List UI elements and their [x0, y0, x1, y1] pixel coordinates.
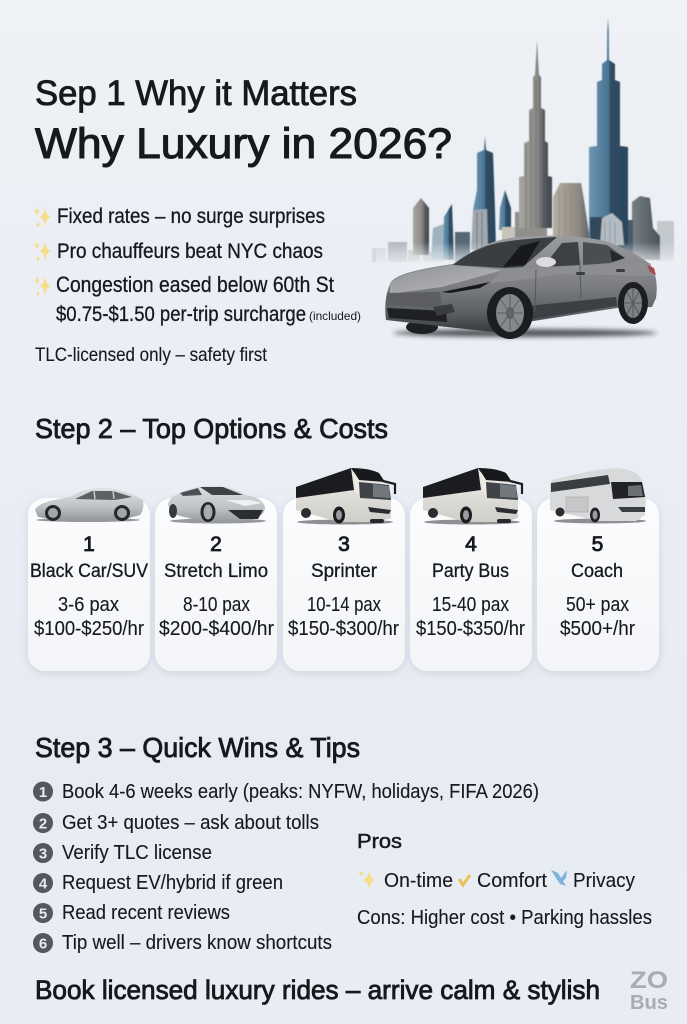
option number: 2 [210, 533, 222, 556]
title: Sep 1 Why it Matters [35, 74, 357, 113]
tip 6: Tip well – drivers know shortcuts [62, 932, 332, 954]
option number: 3 [338, 533, 350, 556]
tip 1: Book 4-6 weeks early (peaks: NYFW, holidays, FIFA 2026) [62, 781, 539, 803]
tip 3: 3 [39, 846, 47, 862]
icon: white coach [550, 468, 646, 524]
pro: privacy: Privacy [573, 870, 635, 892]
step 1 benefit list [34, 205, 361, 366]
capacity: 15-40 pax [432, 594, 509, 616]
option name: Party Bus [432, 561, 509, 582]
icon: butterfly [551, 870, 567, 886]
tip 2: Get 3+ quotes – ask about tolls [62, 812, 319, 834]
panel: black car [28, 488, 150, 671]
capacity: 50+ pax [566, 594, 629, 616]
title [35, 74, 452, 168]
icon: sparkle [34, 207, 51, 229]
numbered tips list [33, 781, 539, 954]
benefit: fixed rates: Fixed rates – no surge surprises [57, 205, 325, 228]
option number: 5 [592, 533, 603, 556]
logo: ZO Bus [630, 967, 668, 1014]
option name: Coach [571, 561, 623, 582]
tip 6: 6 [39, 936, 47, 952]
option number: 1 [83, 533, 95, 556]
icon: sparkle [34, 276, 51, 298]
illustration: city skyline [372, 18, 681, 268]
tip 2: 2 [39, 816, 47, 832]
logo: ZO Bus: ZO [630, 967, 668, 994]
cons line: Cons: Higher cost • Parking hassles [357, 907, 652, 929]
panel: coach [537, 468, 659, 671]
surcharge note: (included) [309, 309, 361, 323]
hourly price: $200-$400/hr [159, 618, 274, 640]
icon: white sedan [168, 486, 266, 524]
tip 5: Read recent reviews [62, 902, 230, 924]
hourly price: $150-$300/hr [288, 618, 399, 640]
hourly price: $100-$250/hr [34, 618, 144, 640]
panel: stretch limo [155, 486, 277, 671]
option name: Sprinter [311, 561, 378, 582]
closing call to action: Book licensed luxury rides – arrive calm & stylish [35, 975, 600, 1005]
capacity: 3-6 pax [58, 594, 119, 616]
benefit: congestion: Congestion eased below 60th St [56, 272, 334, 297]
pro: on-time: On-time [384, 870, 453, 892]
icon: black and white bus [423, 468, 522, 524]
capacity: 8-10 pax [183, 594, 250, 616]
hourly price: $150-$350/hr [416, 618, 525, 640]
benefit: chauffeurs: Pro chauffeurs beat NYC chaos [57, 240, 323, 263]
hourly price: $500+/hr [560, 618, 635, 640]
icon: silver sedan [35, 488, 143, 522]
icon: check [459, 875, 470, 885]
icon: black and white bus [296, 468, 395, 524]
tip 5: 5 [39, 906, 47, 922]
logo: ZO Bus: Bus [630, 992, 668, 1014]
capacity: 10-14 pax [307, 594, 381, 616]
title: Why Luxury in 2026? [35, 120, 452, 168]
option name: Stretch Limo [164, 561, 268, 582]
icon: sparkle [358, 870, 376, 890]
icon: sparkle [34, 241, 51, 263]
heading: step 3: Step 3 – Quick Wins & Tips [35, 732, 360, 763]
tip 4: 4 [39, 876, 48, 892]
pro: comfort: Comfort [477, 870, 547, 892]
tip 3: Verify TLC license [62, 842, 212, 864]
safety note: TLC-licensed only – safety first [35, 345, 268, 366]
heading: step 2: Step 2 – Top Options & Costs [35, 413, 388, 444]
option name: Black Car/SUV [30, 561, 148, 582]
illustration: grey sedan [385, 236, 657, 339]
tip 1: 1 [39, 784, 47, 801]
pros heading: Pros [357, 831, 402, 853]
panel: party bus [410, 468, 532, 671]
option number: 4 [465, 533, 477, 556]
benefit: surcharge: $0.75-$1.50 per-trip surcharge [56, 303, 306, 326]
panel: sprinter [283, 468, 405, 671]
tip 4: Request EV/hybrid if green [62, 872, 283, 894]
panel: pros and cons [357, 831, 652, 929]
